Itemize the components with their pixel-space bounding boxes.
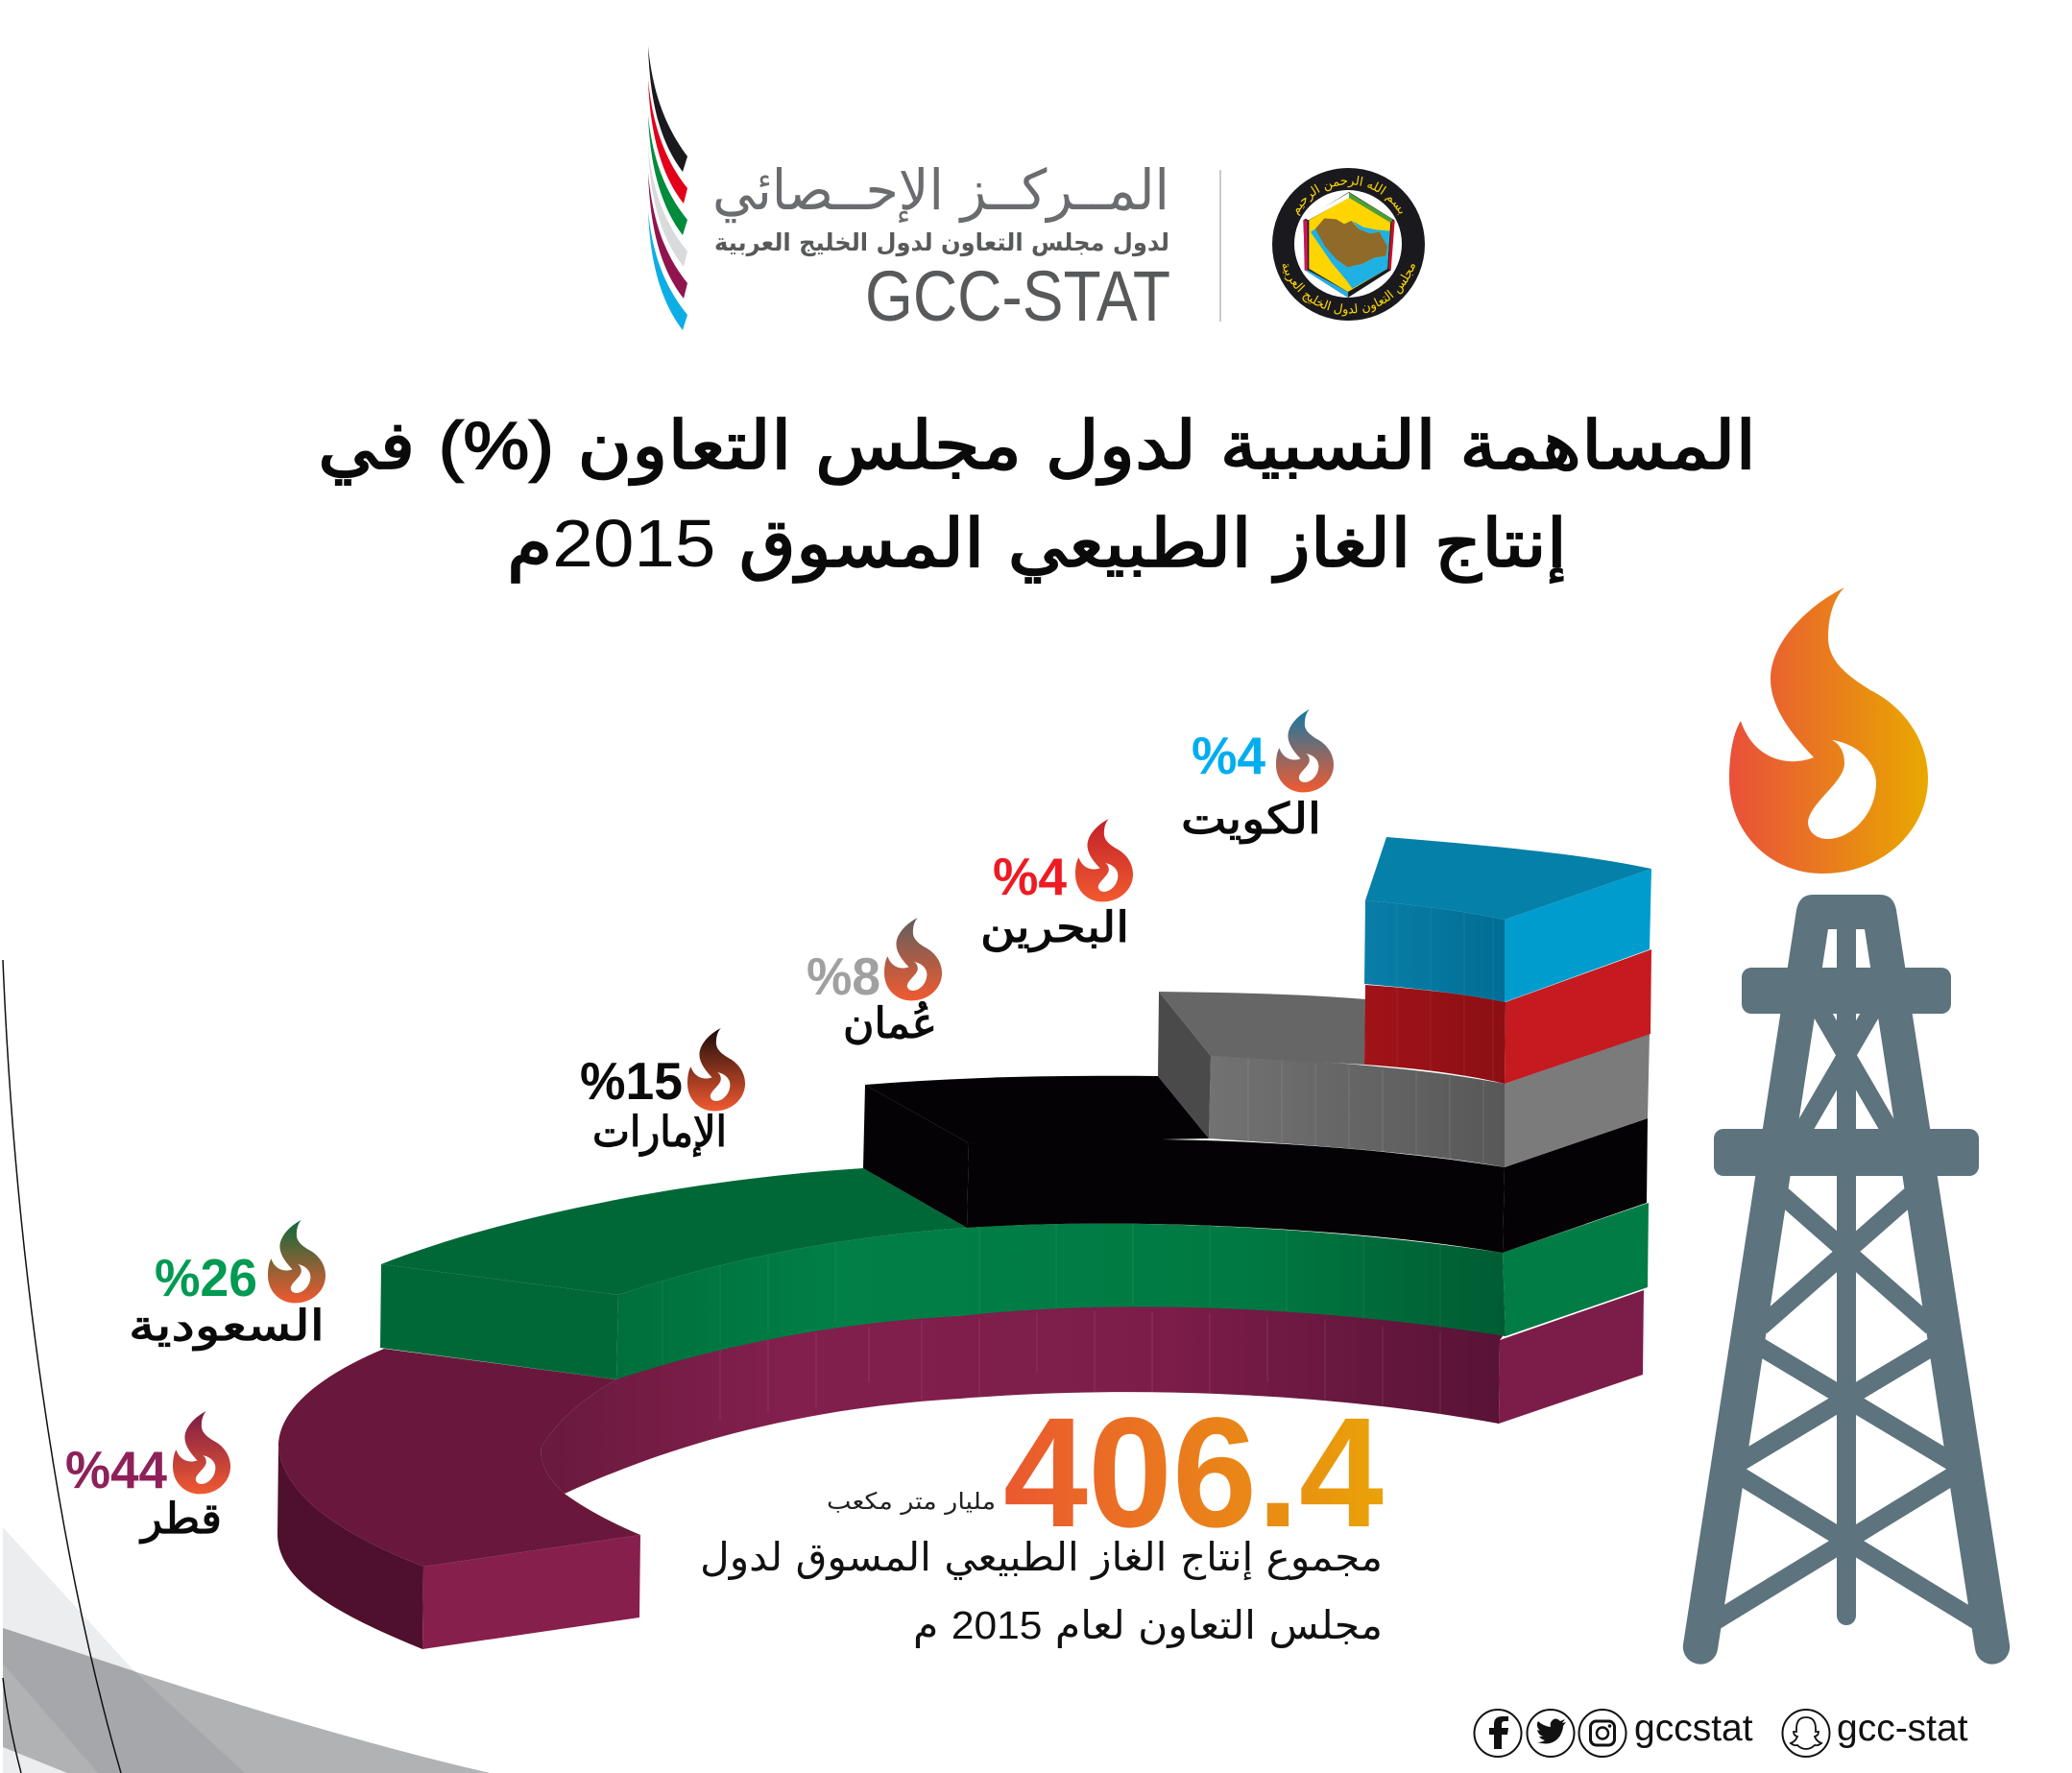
social handles [1475, 1708, 1968, 1757]
emblem: GCC [1272, 168, 1425, 321]
chart: stepped 3D arc [277, 837, 1651, 1649]
title [318, 406, 1756, 584]
handle: gccstat: gccstat [1634, 1708, 1753, 1749]
callout: total production [700, 1384, 1384, 1648]
icon: facebook [1475, 1710, 1521, 1757]
label: Qatar [65, 1411, 230, 1544]
big number: 406.4 [1003, 1384, 1384, 1560]
segment: Bahrain [1364, 949, 1651, 1084]
description line 2: مجلس التعاون لعام 2015 م [913, 1602, 1383, 1648]
flame icon: Saudi Arabia [268, 1220, 325, 1303]
icon: instagram [1578, 1710, 1626, 1757]
logo divider [1219, 170, 1221, 322]
country name: السعودية [129, 1302, 325, 1351]
country name: عُمان [843, 999, 937, 1048]
segment: UAE [863, 1076, 1648, 1253]
icon: gas derrick [1683, 895, 2010, 1665]
country name: الإمارات [592, 1108, 727, 1157]
value: %26 [155, 1248, 257, 1307]
segment: Kuwait [1364, 837, 1651, 1002]
value: %4 [993, 847, 1067, 906]
logo: GCC-STAT [648, 46, 1170, 336]
handle: gcc-stat: gcc-stat [1837, 1708, 1968, 1749]
label: Saudi Arabia [129, 1220, 325, 1351]
flame icon: UAE [687, 1028, 745, 1111]
label: UAE [580, 1028, 745, 1157]
value: %44 [65, 1440, 167, 1499]
country name: قطر [139, 1495, 222, 1544]
segment: Qatar [277, 1290, 1644, 1649]
emblem ring text lower: مجلس التعاون لدول الخليج العربية [1283, 263, 1415, 317]
unit: مليار متر مكعب [827, 1488, 996, 1515]
value: %15 [580, 1051, 683, 1111]
title: المساهمة النسبية لدول مجلس التعاون (%) في [318, 406, 1756, 486]
label: Oman [807, 918, 942, 1048]
country name: الكويت [1181, 795, 1321, 844]
flame icon: Qatar [173, 1411, 230, 1494]
logo Arabic subtitle: لدول مجلس التعاون لدول الخليج العربية [714, 228, 1169, 257]
background swooshes [3, 960, 490, 1773]
description line 1: مجموع إنتاج الغاز الطبيعي المسوق لدول [700, 1534, 1383, 1581]
flame icon: Oman [884, 918, 942, 1000]
flame icon: Kuwait [1276, 709, 1334, 792]
country name: البحرين [980, 903, 1129, 952]
label: Bahrain [980, 819, 1133, 952]
segment: Saudi Arabia [380, 1168, 1649, 1379]
title: إنتاج الغاز الطبيعي المسوق 2015م [507, 504, 1567, 584]
emblem hexagon [1303, 192, 1395, 298]
value: %8 [807, 946, 880, 1006]
icon: twitter [1527, 1710, 1575, 1757]
icon: flare flame [1729, 587, 1928, 874]
logo Arabic name: المــركــز الإحــصائي [712, 157, 1169, 224]
logo ribbons [648, 46, 687, 330]
flame icon: Bahrain [1075, 819, 1133, 901]
value: %4 [1192, 726, 1265, 785]
emblem ring text: بسم الله الرحمن الرحيم [1296, 176, 1403, 216]
label: Kuwait [1181, 709, 1334, 844]
logo wordmark: GCC-STAT [865, 256, 1170, 336]
icon: snapchat [1782, 1710, 1830, 1757]
segment: Oman [1158, 992, 1650, 1167]
